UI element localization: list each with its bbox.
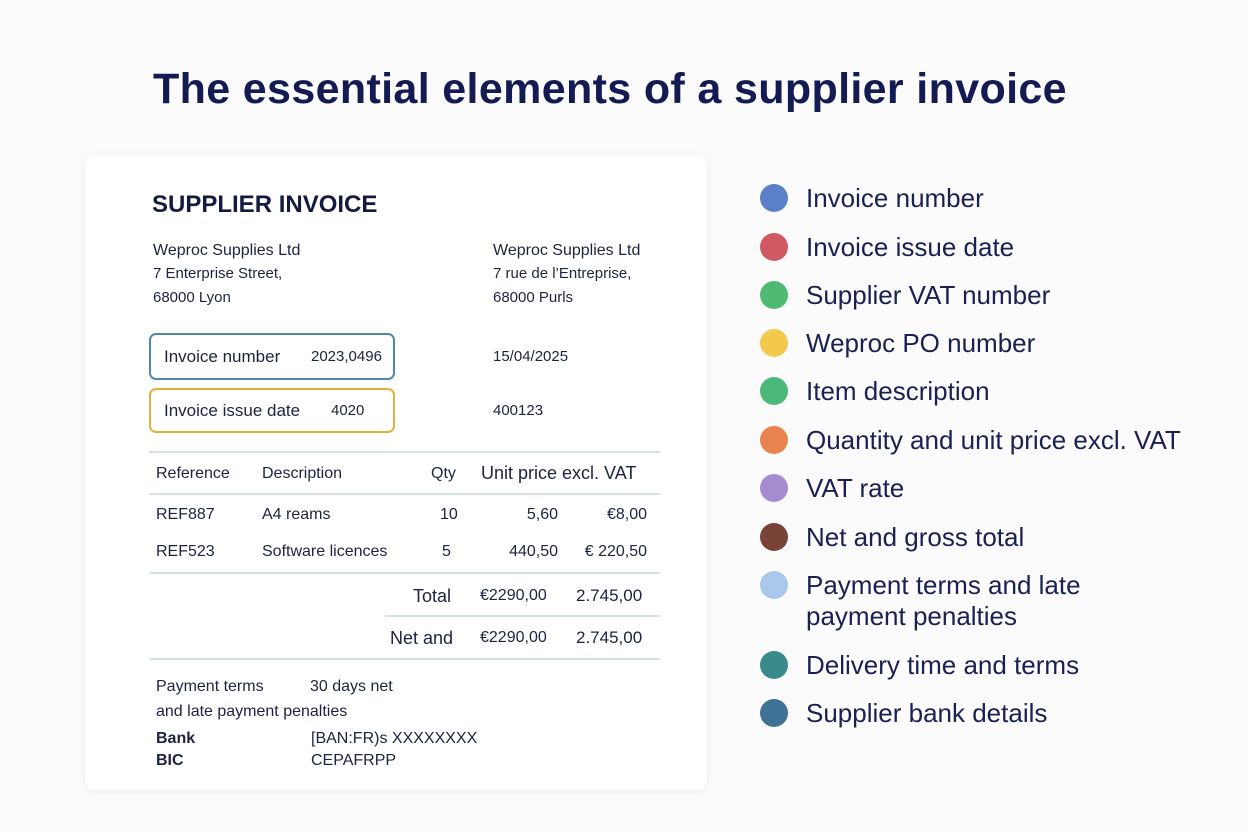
panel: invoice card: CEPAFRPP [311,752,396,769]
text: payment terms: and late payment penalties [156,703,347,720]
table: items: Software licences [262,543,387,560]
table: items: 5 [442,543,451,560]
legend item: description: Item description [806,376,990,406]
legend item: quantity: Quantity and unit price excl. VAT [806,425,1181,455]
text: payment terms: Payment terms [156,678,264,695]
box: invoice issue date: Invoice issue date [164,401,300,420]
table: items: Description [262,465,342,482]
table: items: A4 reams [262,506,330,523]
title: The essential elements of a supplier invoice [153,65,1067,113]
table: items: € 220,50 [585,543,647,560]
table: items: REF887 [156,506,215,523]
box: invoice number: Invoice number [164,347,280,366]
text: supplier address: Weproc Supplies Ltd [153,242,300,259]
heading: supplier invoice: SUPPLIER INVOICE [152,191,377,218]
text: bank details [156,730,196,769]
legend item: totals: Net and gross total [806,522,1024,552]
table: items: 5,60 [527,506,558,523]
legend item: payment terms [760,570,1081,631]
text: buyer address: Weproc Supplies Ltd [493,242,640,259]
table: items: REF523 [156,543,215,560]
panel: invoice card [85,155,707,790]
legend item: issue date: Invoice issue date [806,232,1014,262]
box: invoice issue date: 4020 [331,402,364,419]
legend item: vat number: Supplier VAT number [806,280,1050,310]
box: invoice number [149,333,395,380]
table: items: Qty [431,465,456,482]
text: supplier address: 7 Enterprise Street, [153,265,282,282]
text: bank details: BIC [156,752,184,769]
legend item: payment terms: Payment terms and late [806,570,1081,600]
table: items: Reference [156,465,230,482]
panel: invoice card: [BAN:FR)s XXXXXXXX [311,730,477,747]
table: items: Net and [390,628,453,648]
text: supplier address: 68000 Lyon [153,289,231,306]
table: items: 10 [440,506,458,523]
table: items: €2290,00 [480,629,547,646]
text: supplier address [153,242,300,306]
table: items: 440,50 [509,543,558,560]
table: items: Unit price excl. VAT [481,463,636,483]
text: bank details: Bank [156,730,195,747]
text: payment terms [156,678,347,720]
legend item: vat rate: VAT rate [806,473,904,503]
legend [760,183,1181,728]
box: invoice issue date [149,388,395,433]
table: items [149,463,660,648]
table: items: €8,00 [607,506,647,523]
text: payment terms value: 30 days net [310,678,393,695]
text: date: 15/04/2025 [493,348,568,365]
legend item: po: Weproc PO number [806,328,1035,358]
legend item: payment terms: payment penalties [806,601,1017,631]
text: buyer address: 7 rue de l’Entreprise, [493,265,631,282]
legend item: vat rate [760,473,904,503]
table: items: Total [413,586,451,606]
table: items: 2.745,00 [576,628,642,647]
table: items: €2290,00 [480,587,547,604]
table: items: 2.745,00 [576,586,642,605]
text: PO: 400123 [493,402,543,419]
legend item: delivery: Delivery time and terms [806,650,1079,680]
legend item: invoice number: Invoice number [806,183,984,213]
text: buyer address: 68000 Purls [493,289,573,306]
text: buyer address [493,242,640,306]
box: invoice number: 2023,0496 [311,348,382,365]
legend item: bank: Supplier bank details [806,698,1047,728]
